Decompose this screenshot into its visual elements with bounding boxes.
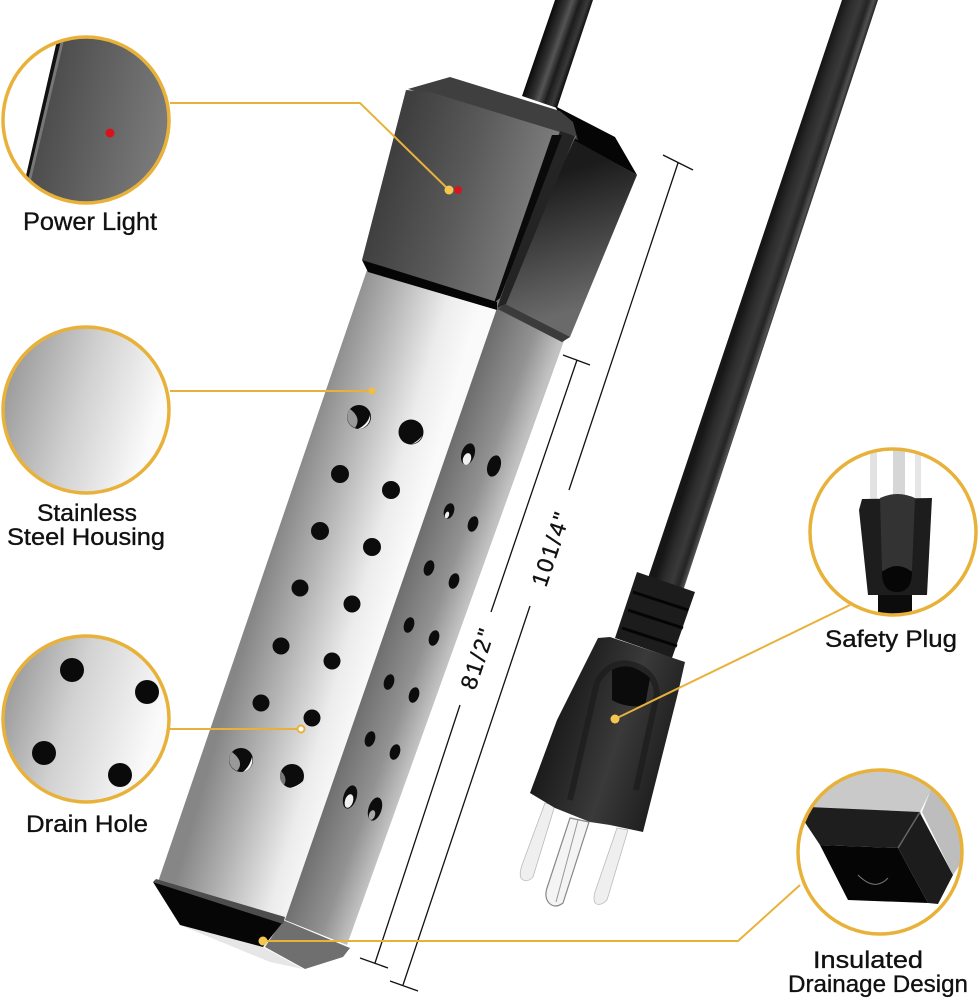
cap front face	[362, 90, 576, 307]
callout: power light	[0, 34, 462, 236]
leader dot	[444, 186, 454, 194]
callout: safety plug	[610, 448, 978, 724]
circle detail: holes	[3, 636, 169, 802]
end cap: insulated drainage base	[153, 879, 350, 969]
leader line	[615, 605, 850, 719]
hole highlights	[229, 409, 422, 788]
plug strain relief	[615, 572, 695, 658]
long power cord	[644, 0, 878, 600]
heater body	[158, 270, 565, 945]
label: Stainless	[37, 500, 137, 527]
label: Insulated	[813, 947, 923, 974]
top housing cap	[362, 77, 637, 342]
leader line	[170, 103, 449, 190]
callout: stainless steel housing	[3, 327, 376, 551]
side hole highlights	[343, 452, 473, 821]
leader dot	[258, 936, 268, 946]
plug body	[530, 637, 685, 832]
stainless side face	[285, 308, 565, 945]
stainless front face	[158, 270, 497, 920]
cap top dark corner	[555, 106, 637, 175]
circle detail: plug front	[859, 450, 932, 614]
callout: drain hole	[3, 636, 304, 838]
side drain holes	[340, 442, 504, 822]
dimension: 10 1/4 inch: 101/4"	[526, 509, 575, 590]
callout: stainless steel housing: Steel Housing	[7, 524, 165, 551]
dimension: 10 1/4 inch	[390, 155, 693, 991]
leader dot	[368, 388, 376, 394]
label: Power Light	[23, 208, 157, 236]
front drain holes	[229, 405, 424, 788]
callout: insulated drainage design: Drainage Design	[788, 971, 968, 998]
circle detail: brushed steel	[3, 327, 169, 493]
leader ring	[298, 726, 304, 732]
cap top band	[408, 77, 578, 140]
upper power cord	[522, 0, 593, 108]
label: Safety Plug	[825, 626, 957, 653]
leader line	[263, 885, 800, 941]
leader line	[170, 728, 297, 730]
plug prongs	[520, 803, 628, 906]
label: Drain Hole	[26, 811, 148, 838]
indicator light on heater	[454, 186, 462, 194]
callout: insulated drainage design	[258, 760, 970, 998]
dimension: 8 1/2 inch	[360, 355, 590, 968]
circle detail: red indicator	[26, 38, 168, 202]
cap side face	[497, 140, 637, 342]
leader line	[170, 390, 372, 392]
cap bottom lip	[362, 260, 497, 310]
dimension: 8 1/2 inch: 81/2"	[455, 626, 499, 693]
leader dot	[610, 714, 620, 724]
circle detail: base underside	[805, 772, 960, 904]
